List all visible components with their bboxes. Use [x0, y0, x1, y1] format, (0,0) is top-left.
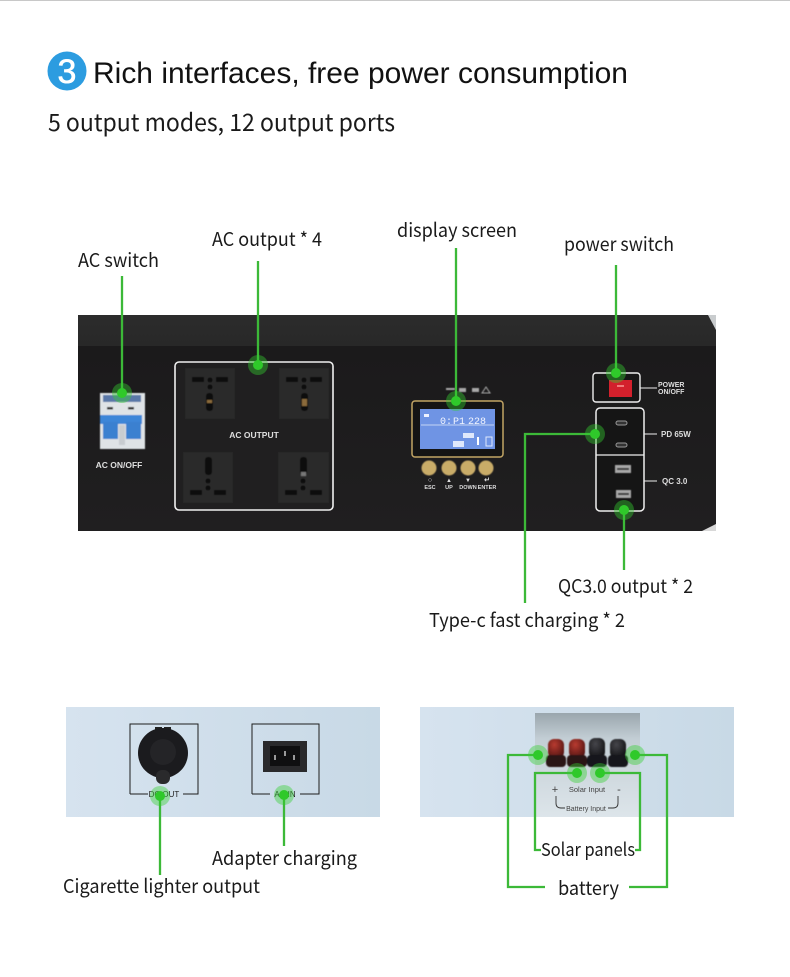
AC switch caption: AC ON/OFF: [96, 460, 142, 470]
terminal captions: -: [617, 784, 621, 796]
cigarette lighter socket: DC OUT: [149, 790, 179, 799]
panel: cigarette lighter and adapter: [66, 707, 380, 817]
button captions: ▲: [446, 478, 452, 484]
callout: solar panels: Solar panels: [541, 836, 635, 862]
AC output caption: AC OUTPUT: [229, 430, 280, 440]
button captions: ↵: [484, 477, 490, 484]
callout: battery: [508, 745, 667, 901]
callout: battery: battery: [558, 874, 619, 901]
power switch: [593, 373, 685, 402]
subtitle: 5 output modes, 12 output ports: [48, 103, 395, 138]
callout: QC3.0 output: QC3.0 output * 2: [558, 572, 693, 599]
callout: Type-c fast charging: Type-c fast charging * 2: [429, 606, 625, 633]
terminal bracket: [535, 713, 640, 817]
AC breaker switch: [100, 393, 145, 449]
callout: AC switch: AC switch: [78, 246, 159, 273]
callout: AC output: AC output * 4: [212, 225, 322, 252]
button captions: ENTER: [478, 485, 496, 491]
power switch: POWER: [658, 382, 684, 389]
panel: main front panel: [78, 315, 716, 531]
terminal captions: Battery Input: [566, 806, 606, 813]
socket top left: [185, 368, 235, 419]
button captions: ESC: [424, 485, 436, 491]
callout: solar panels: [535, 763, 640, 862]
callout: adapter charging: Adapter charging: [212, 844, 357, 871]
USB port block: [596, 408, 691, 511]
callout: display screen: display screen: [397, 216, 517, 243]
callout: cigarette lighter output: [63, 786, 260, 899]
button captions: UP: [445, 485, 453, 491]
display screen: 0:: [440, 417, 452, 428]
title: Rich interfaces, free power consumption: [93, 57, 628, 90]
AC output socket block: [175, 362, 333, 510]
USB port block: QC 3.0: [662, 477, 688, 486]
control buttons: [422, 460, 494, 476]
power switch: ON/OFF: [658, 389, 685, 396]
callout: adapter charging: [212, 785, 357, 871]
display screen: 228: [468, 417, 486, 428]
display indicators: [446, 387, 490, 393]
terminal captions: +: [552, 784, 558, 796]
terminal posts: [546, 738, 628, 767]
callout: power switch: [564, 230, 674, 383]
cigarette lighter socket: [130, 724, 198, 799]
button captions: DOWN: [459, 485, 477, 491]
USB port block: PD 65W: [661, 430, 691, 439]
callout: QC3.0 output: [558, 500, 693, 599]
heading: badge and title: [48, 52, 628, 91]
button captions: [424, 477, 496, 491]
adapter inlet: AC IN: [274, 790, 296, 799]
button captions: ▼: [465, 478, 471, 484]
socket bottom left: [183, 452, 233, 503]
panel: solar and battery terminals: [420, 707, 734, 817]
callout: power switch: power switch: [564, 230, 674, 257]
socket bottom right: [278, 452, 329, 503]
icon: number 3 badge: 3: [58, 53, 76, 91]
callout: Type-c fast charging: [429, 424, 625, 633]
icon: number 3 badge: [48, 52, 86, 91]
terminal captions: [552, 784, 621, 813]
socket top right: [279, 368, 329, 419]
callout: cigarette lighter output: Cigarette lighter output: [63, 872, 260, 899]
display screen: P1: [453, 417, 465, 428]
display screen: [412, 401, 503, 457]
callout: AC switch: [78, 246, 159, 403]
callout: AC output: [212, 225, 322, 375]
terminal captions: Solar Input: [569, 785, 606, 794]
callout: display screen: [397, 216, 517, 411]
button captions: ○: [428, 477, 432, 484]
adapter inlet: [252, 724, 319, 799]
